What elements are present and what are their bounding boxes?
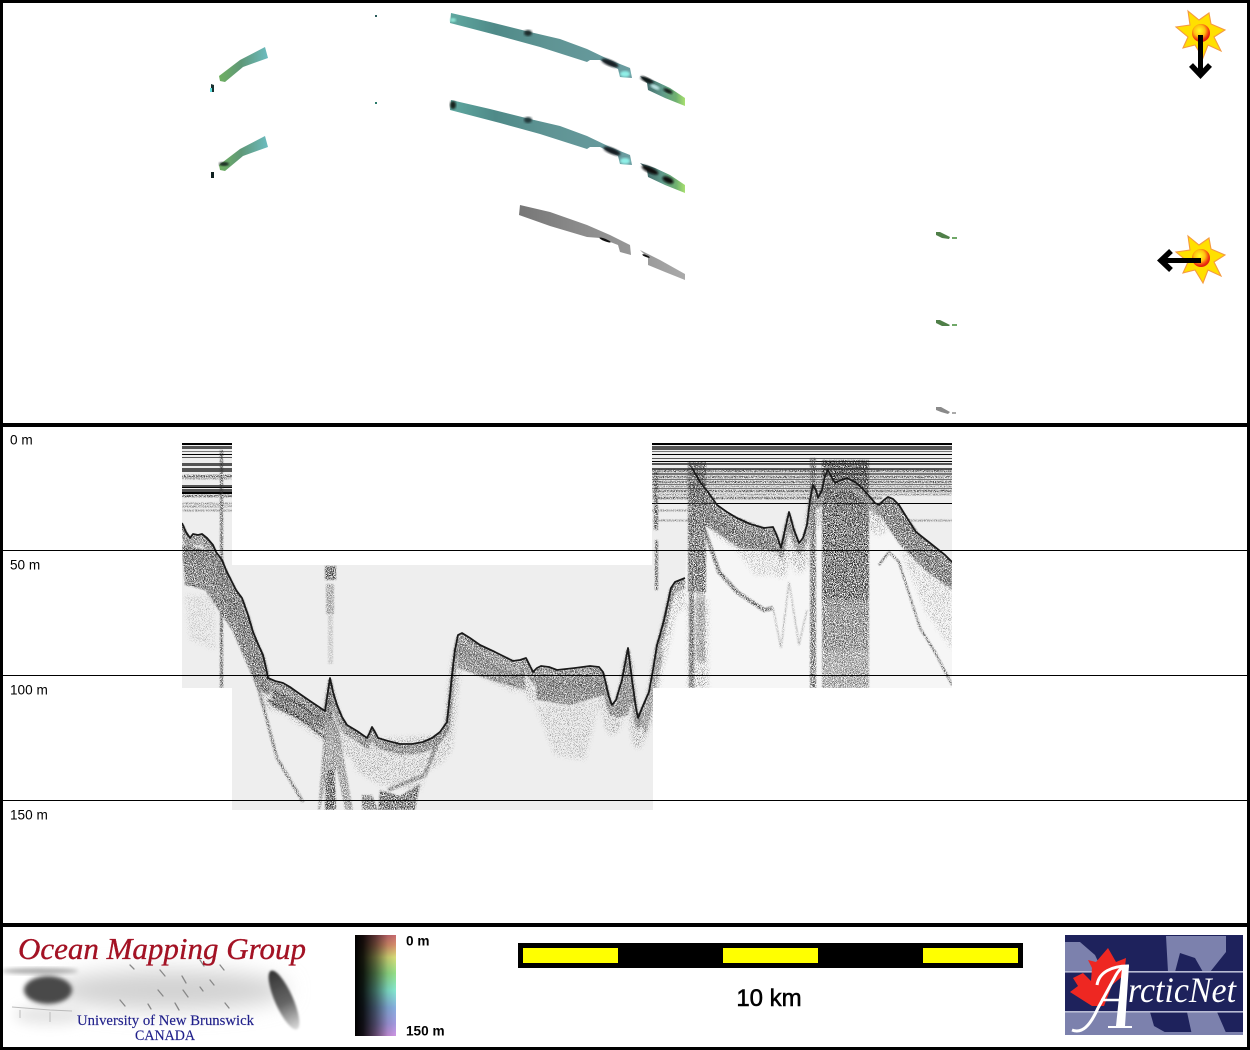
- depth colour legend: [355, 934, 445, 1038]
- depth colour legend: 150 m: [406, 1024, 445, 1038]
- swath row 2: colour sun-illuminated: [211, 100, 685, 193]
- icon: sun with leftward illumination arrow: [1161, 236, 1225, 283]
- speckled stripes: [182, 450, 952, 690]
- sub-bottom band below seafloor: [182, 471, 952, 810]
- vertical noise columns: [325, 458, 869, 688]
- depth label: 150 m: 150 m: [10, 808, 48, 822]
- faded scatter below sub-bottom band: [182, 483, 952, 790]
- scale bar: 10 km: [736, 985, 802, 1012]
- logo: ArcticNet: [1065, 935, 1243, 1035]
- depth label: 50 m: 50 m: [10, 558, 40, 572]
- logo: Ocean Mapping Group: CANADA: [135, 1028, 195, 1044]
- swath row 1: colour sun-illuminated: [210, 13, 685, 106]
- logo: Ocean Mapping Group: University of New Brunswick: [77, 1013, 254, 1029]
- panel: echosounder profile: [3, 432, 1247, 822]
- depth label: 100 m: 100 m: [10, 682, 48, 698]
- scale bar: [518, 943, 1023, 1012]
- icon: sun with downward illumination arrow: [1176, 11, 1225, 75]
- swath row 3: greyscale backscatter: [519, 205, 685, 280]
- logo: Ocean Mapping Group: [2, 932, 306, 1044]
- swath fragments at right: [936, 232, 957, 414]
- depth colour legend: 0 m: [406, 934, 429, 948]
- logo: ArcticNet: rcticNet: [1128, 970, 1237, 1010]
- panel: map view with swaths: [210, 11, 1225, 414]
- depth label: 0 m: 0 m: [10, 432, 33, 448]
- depth grid lines: [3, 550, 1247, 801]
- sub-bottom multiple reflectors: [253, 522, 952, 802]
- water column noise stripes: [182, 443, 952, 504]
- echogram image: [182, 443, 952, 810]
- logo: Ocean Mapping Group: Ocean Mapping Group: [18, 932, 306, 966]
- panel: footer: [2, 932, 1243, 1044]
- seafloor echo trace: [182, 468, 952, 744]
